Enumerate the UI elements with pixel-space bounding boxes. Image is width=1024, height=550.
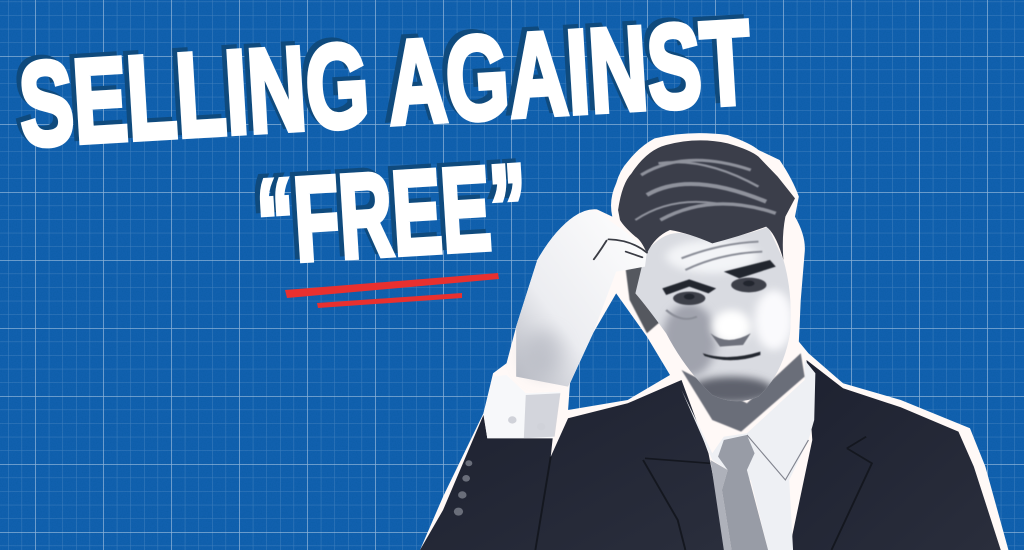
suit — [420, 360, 1001, 550]
man scratching his head — [420, 133, 1008, 550]
hair — [618, 140, 795, 260]
title: "FREE": “FREE” — [248, 136, 526, 285]
neck — [682, 353, 805, 432]
tie — [718, 435, 768, 550]
title: "FREE" — [248, 136, 531, 289]
face — [636, 227, 790, 402]
arm shading — [524, 330, 562, 377]
title: "FREE": “FREE” — [253, 140, 531, 289]
shirt cuff — [483, 375, 560, 438]
sleeve buttons — [454, 460, 472, 516]
raised arm and hand — [516, 211, 647, 387]
lapels — [535, 437, 872, 550]
shirt and collar — [682, 360, 815, 550]
red double underline — [285, 273, 499, 308]
fingers — [594, 239, 647, 259]
ear and side hair behind hand — [626, 263, 666, 333]
facial features — [662, 242, 776, 360]
white cut-out outline — [420, 133, 1008, 550]
hair highlights — [635, 160, 776, 220]
